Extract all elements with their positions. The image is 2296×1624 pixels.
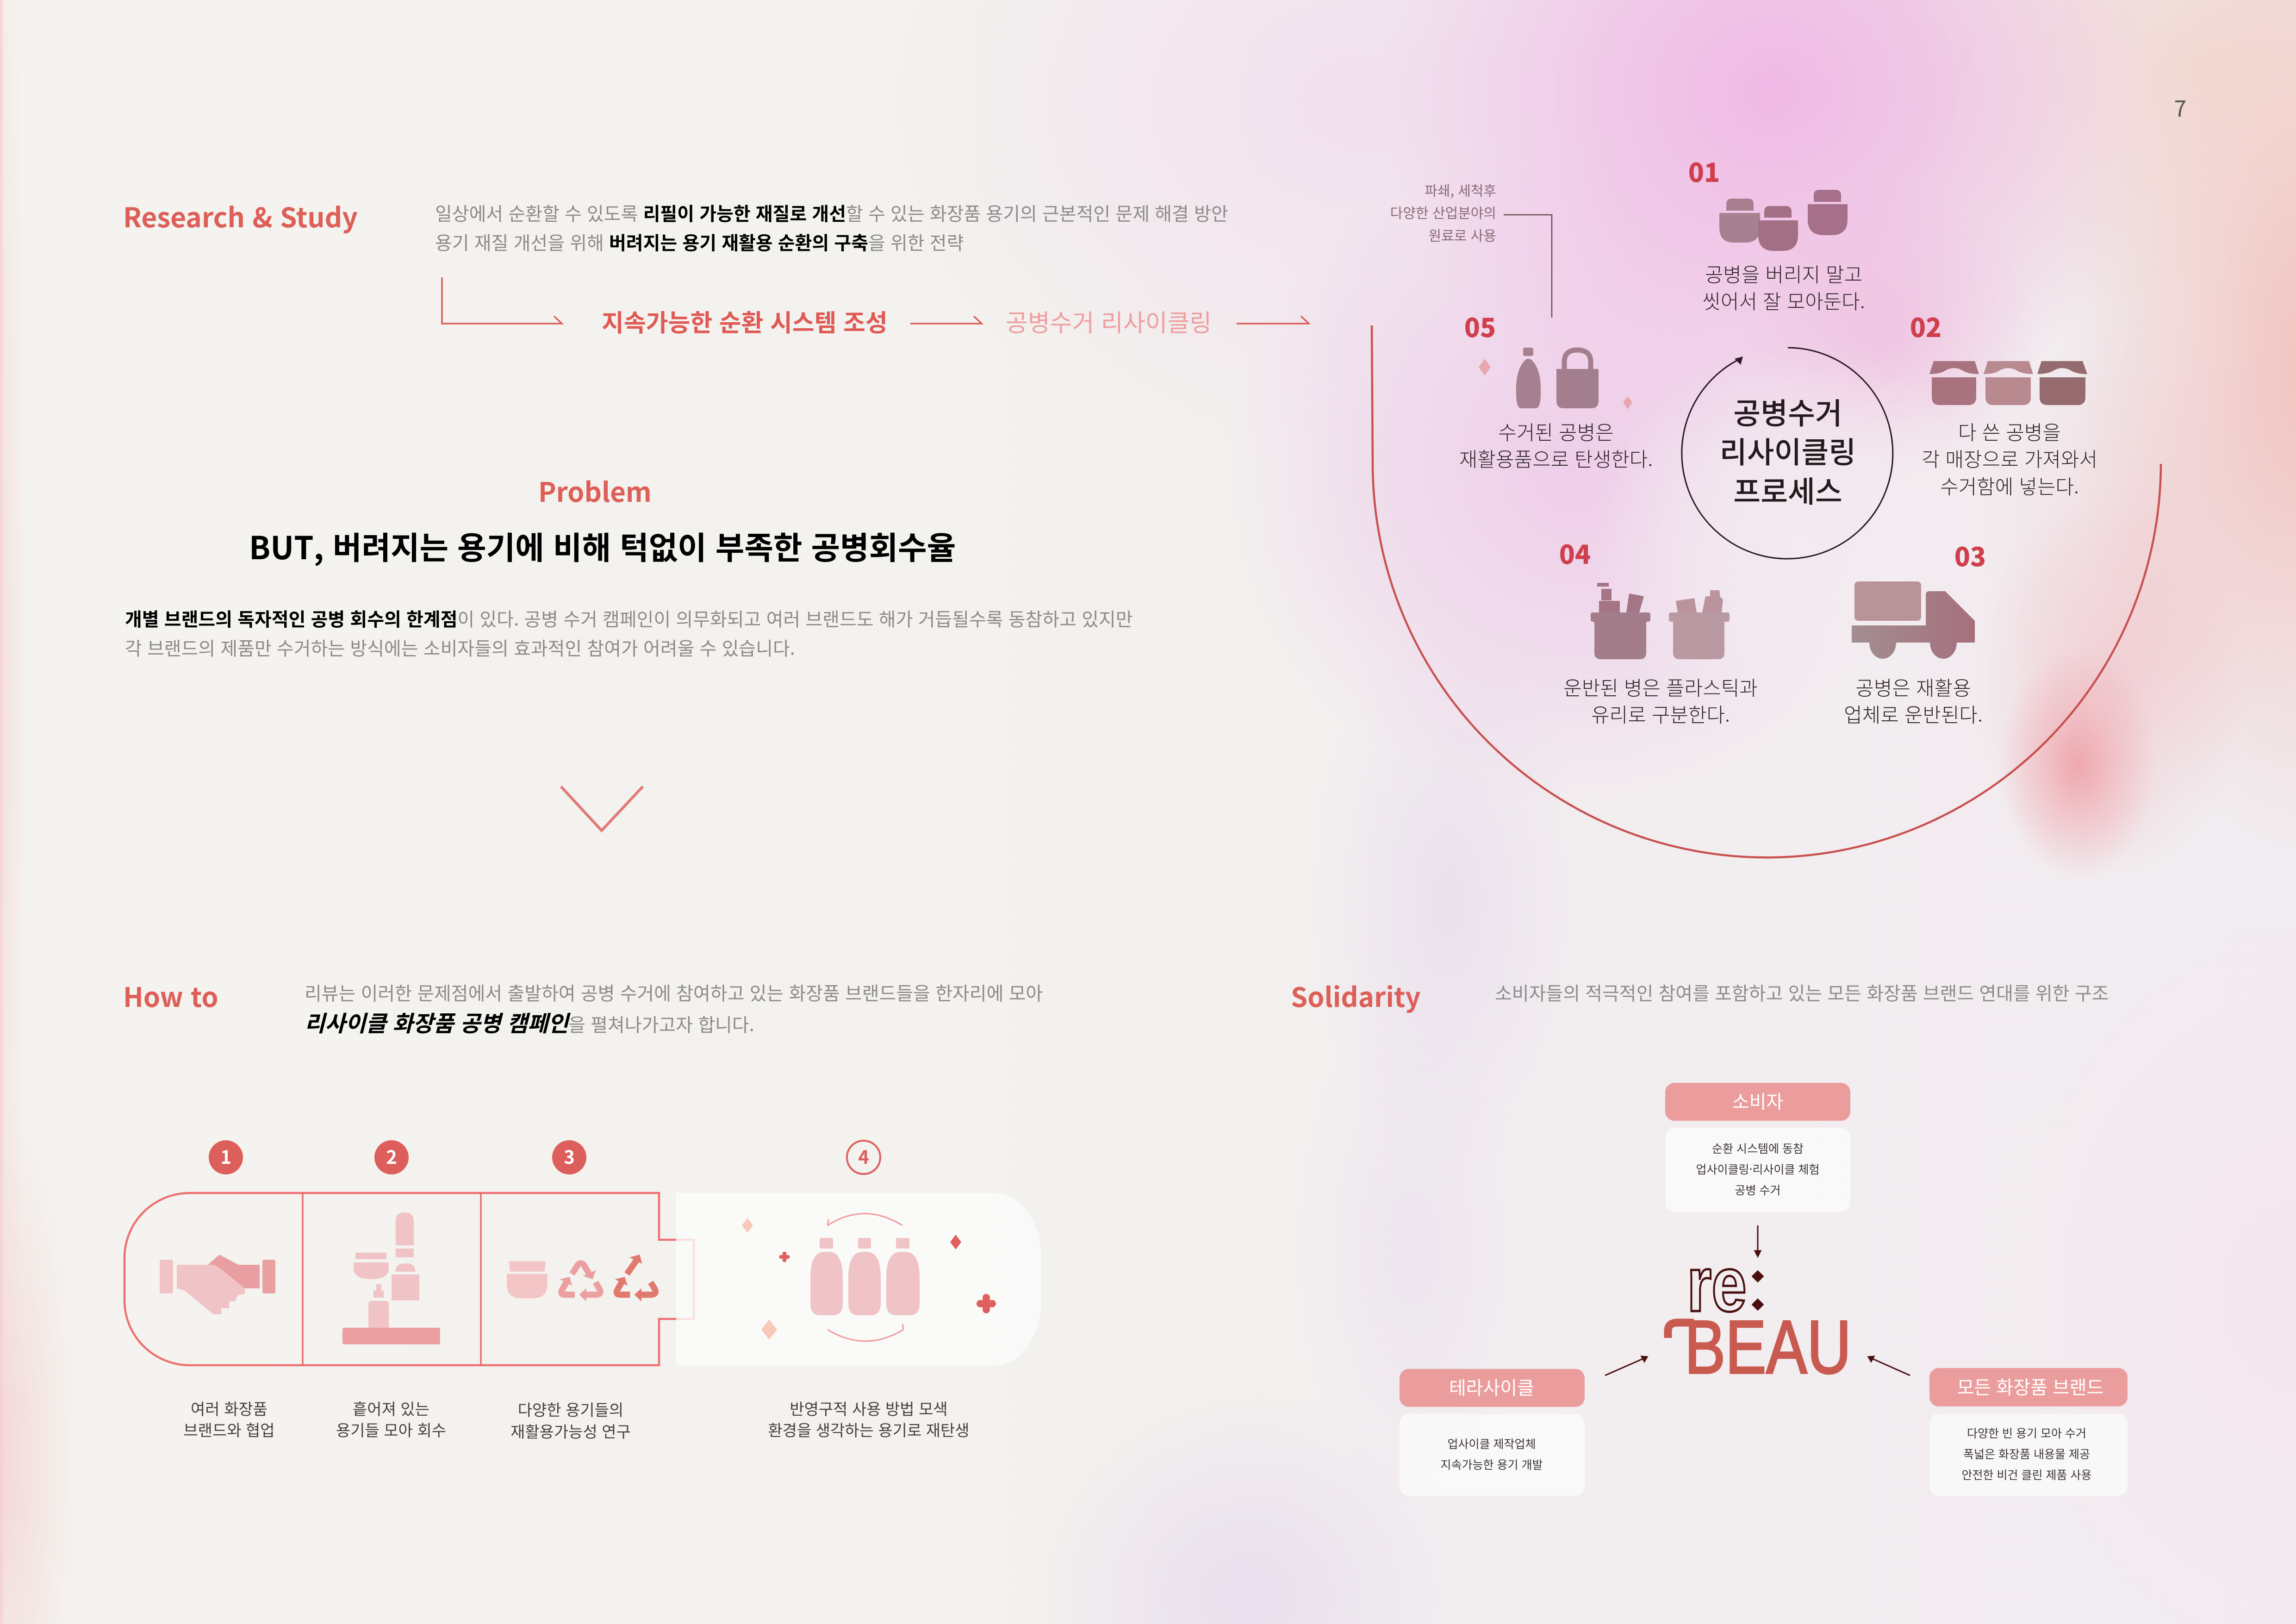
step captions: 브랜드와 협업 [183,1418,275,1441]
step 04: 04 [1559,534,1591,572]
group: all cosmetic brands: 폭넓은 화장품 내용물 제공 [1963,1445,2090,1462]
heading: How to: How to [123,976,218,1015]
group: all cosmetic brands: 모든 화장품 브랜드 [1957,1373,2103,1399]
panel: recycling process [1372,152,2161,857]
step 02 [1910,307,2097,500]
step 02: 수거함에 넣는다. [1940,471,2079,500]
step captions: 용기들 모아 회수 [336,1418,446,1441]
step captions: 재활용가능성 연구 [510,1419,631,1442]
step 03: 공병은 재활용 [1855,673,1971,701]
icon: handshake [160,1255,275,1314]
callout: material reuse: 다양한 산업분야의 [1390,202,1496,222]
logo: re:BEAU [1668,1241,1851,1389]
capsule dividers [303,1193,481,1365]
icon: three jars [1929,361,2087,405]
callout: material reuse [1390,180,1552,318]
callout: material reuse: 파쇄, 세척후 [1425,180,1496,200]
callout: material reuse: 원료로 사용 [1429,225,1496,245]
white result panel [676,1193,1041,1365]
text block: solidarity description: 소비자들의 적극적인 참여를 포함하고 있는 모든 화장품 브랜드 연대를 위한 구조 [1495,979,2109,1006]
step number badges: 1 [220,1143,231,1169]
group: terracycle: 테라사이클 [1449,1373,1534,1400]
arrow: to recycling [910,316,982,324]
step 03: 업체로 운반된다. [1844,700,1983,728]
capsule outline [124,1193,694,1365]
group: consumers: 공병 수거 [1735,1181,1781,1198]
panel: how to steps [124,1140,1041,1442]
text block: research description [435,199,1228,255]
flow step: sustainable system: 지속가능한 순환 시스템 조성 [602,304,888,338]
step 04: 유리로 구분한다. [1591,700,1730,728]
icon: jar and recycling arrows [507,1255,655,1301]
text block: how to description: 리사이클 화장품 공병 캠페인을 펼쳐나가고자 합니다. [305,1006,754,1038]
step number badges: 2 [386,1143,397,1169]
heading: Research & Study: Research & Study [123,196,358,235]
group: terracycle: 지속가능한 용기 개발 [1440,1456,1543,1473]
step 02: 02 [1910,307,1941,345]
step 02: 다 쓴 공병을 [1958,417,2061,446]
icon: reborn bottles [742,1214,996,1341]
arrow: consumers to logo [1755,1225,1761,1256]
group: all cosmetic brands [1929,1368,2128,1496]
logo: re:BEAU: re [1687,1241,1747,1328]
arrow: chevron down [561,787,643,831]
page number: 7 [2174,91,2186,123]
panel: solidarity diagram [1400,1083,2128,1496]
group: all cosmetic brands: 안전한 비건 클린 제품 사용 [1961,1466,2092,1483]
step captions: 반영구적 사용 방법 모색 [790,1397,948,1419]
flow step: bottle recycling: 공병수거 리사이클링 [1006,304,1212,338]
step number badges [209,1140,880,1174]
step 05: 수거된 공병은 [1498,417,1614,446]
step 04: 운반된 병은 플라스틱과 [1563,673,1758,701]
flow: strategy arrows [442,277,1309,338]
step number badges: 4 [858,1143,869,1169]
step 03: 03 [1954,537,1986,574]
group: terracycle: 업사이클 제작업체 [1447,1435,1536,1452]
step 01: 01 [1688,152,1720,190]
step captions: 다양한 용기들의 [518,1398,623,1420]
center circle with title: 리사이클링 [1720,429,1856,472]
step 01: 씻어서 잘 모아둔다. [1702,286,1865,315]
text block: problem description: 각 브랜드의 제품만 수거하는 방식에는 소비자들의 효과적인 참여가 어려울 수 있습니다. [125,634,795,661]
icon: bottle and bag [1479,348,1632,409]
arrow: elbow [442,277,562,324]
text block: problem description: 개별 브랜드의 독자적인 공병 회수의 한계점이 있다. 공병 수거 캠페인이 의무화되고 여러 브랜드도 해가 거듭될수록 동참하고 있지만 [125,605,1133,631]
center circle with title: 프로세스 [1733,468,1842,511]
step 01: 공병을 버리지 말고 [1705,259,1862,288]
step 05: 재활용품으로 탄생한다. [1459,444,1653,473]
step number badges: 3 [564,1143,575,1169]
logo: re:BEAU: BEAU [1685,1305,1851,1389]
step 03 [1844,537,1986,728]
step 05: 05 [1464,307,1496,345]
heading: problem statement: BUT, 버려지는 용기에 비해 턱없이 부족한 공병회수율 [249,523,956,568]
arrow: terracycle to logo [1605,1356,1647,1375]
step 04 [1559,534,1758,728]
icon: truck [1852,581,1975,659]
step captions [183,1397,970,1442]
step captions: 여러 화장품 [191,1397,268,1419]
step 02: 각 매장으로 가져와서 [1922,444,2097,473]
group: consumers: 소비자 [1732,1087,1783,1114]
text block: research description: 일상에서 순환할 수 있도록 리필이 가능한 재질로 개선할 수 있는 화장품 용기의 근본적인 문제 해결 방안 [435,199,1228,226]
center circle with title: 공병수거 [1733,390,1842,433]
arrow: to process [1237,316,1309,324]
group: consumers [1665,1083,1850,1212]
text block: research description: 용기 재질 개선을 위해 버려지는 용기 재활용 순환의 구축을 위한 전략 [435,228,964,255]
center circle with title [1682,348,1893,559]
text block: how to description: 리뷰는 이러한 문제점에서 출발하여 공병 수거에 참여하고 있는 화장품 브랜드들을 한자리에 모아 [305,979,1043,1006]
step captions: 환경을 생각하는 용기로 재탄생 [768,1418,970,1441]
group: all cosmetic brands: 다양한 빈 용기 모아 수거 [1967,1424,2086,1441]
heading: Problem: Problem [538,471,652,510]
large red semicircle [1372,325,2161,857]
step 01 [1688,152,1865,315]
text block: problem description [125,605,1133,661]
icon: cosmetics [342,1212,440,1344]
step 05 [1459,307,1653,473]
icon: jars [1719,190,1848,251]
step captions: 흩어져 있는 [353,1397,429,1419]
arrow: brands to logo [1868,1356,1910,1375]
text block: how to description [305,979,1043,1038]
group: terracycle [1400,1369,1585,1496]
icon: sorting buckets [1591,583,1730,659]
group: consumers: 업사이클링·리사이클 체험 [1696,1161,1819,1177]
heading: Solidarity: Solidarity [1291,976,1421,1015]
group: consumers: 순환 시스템에 동참 [1712,1140,1804,1156]
